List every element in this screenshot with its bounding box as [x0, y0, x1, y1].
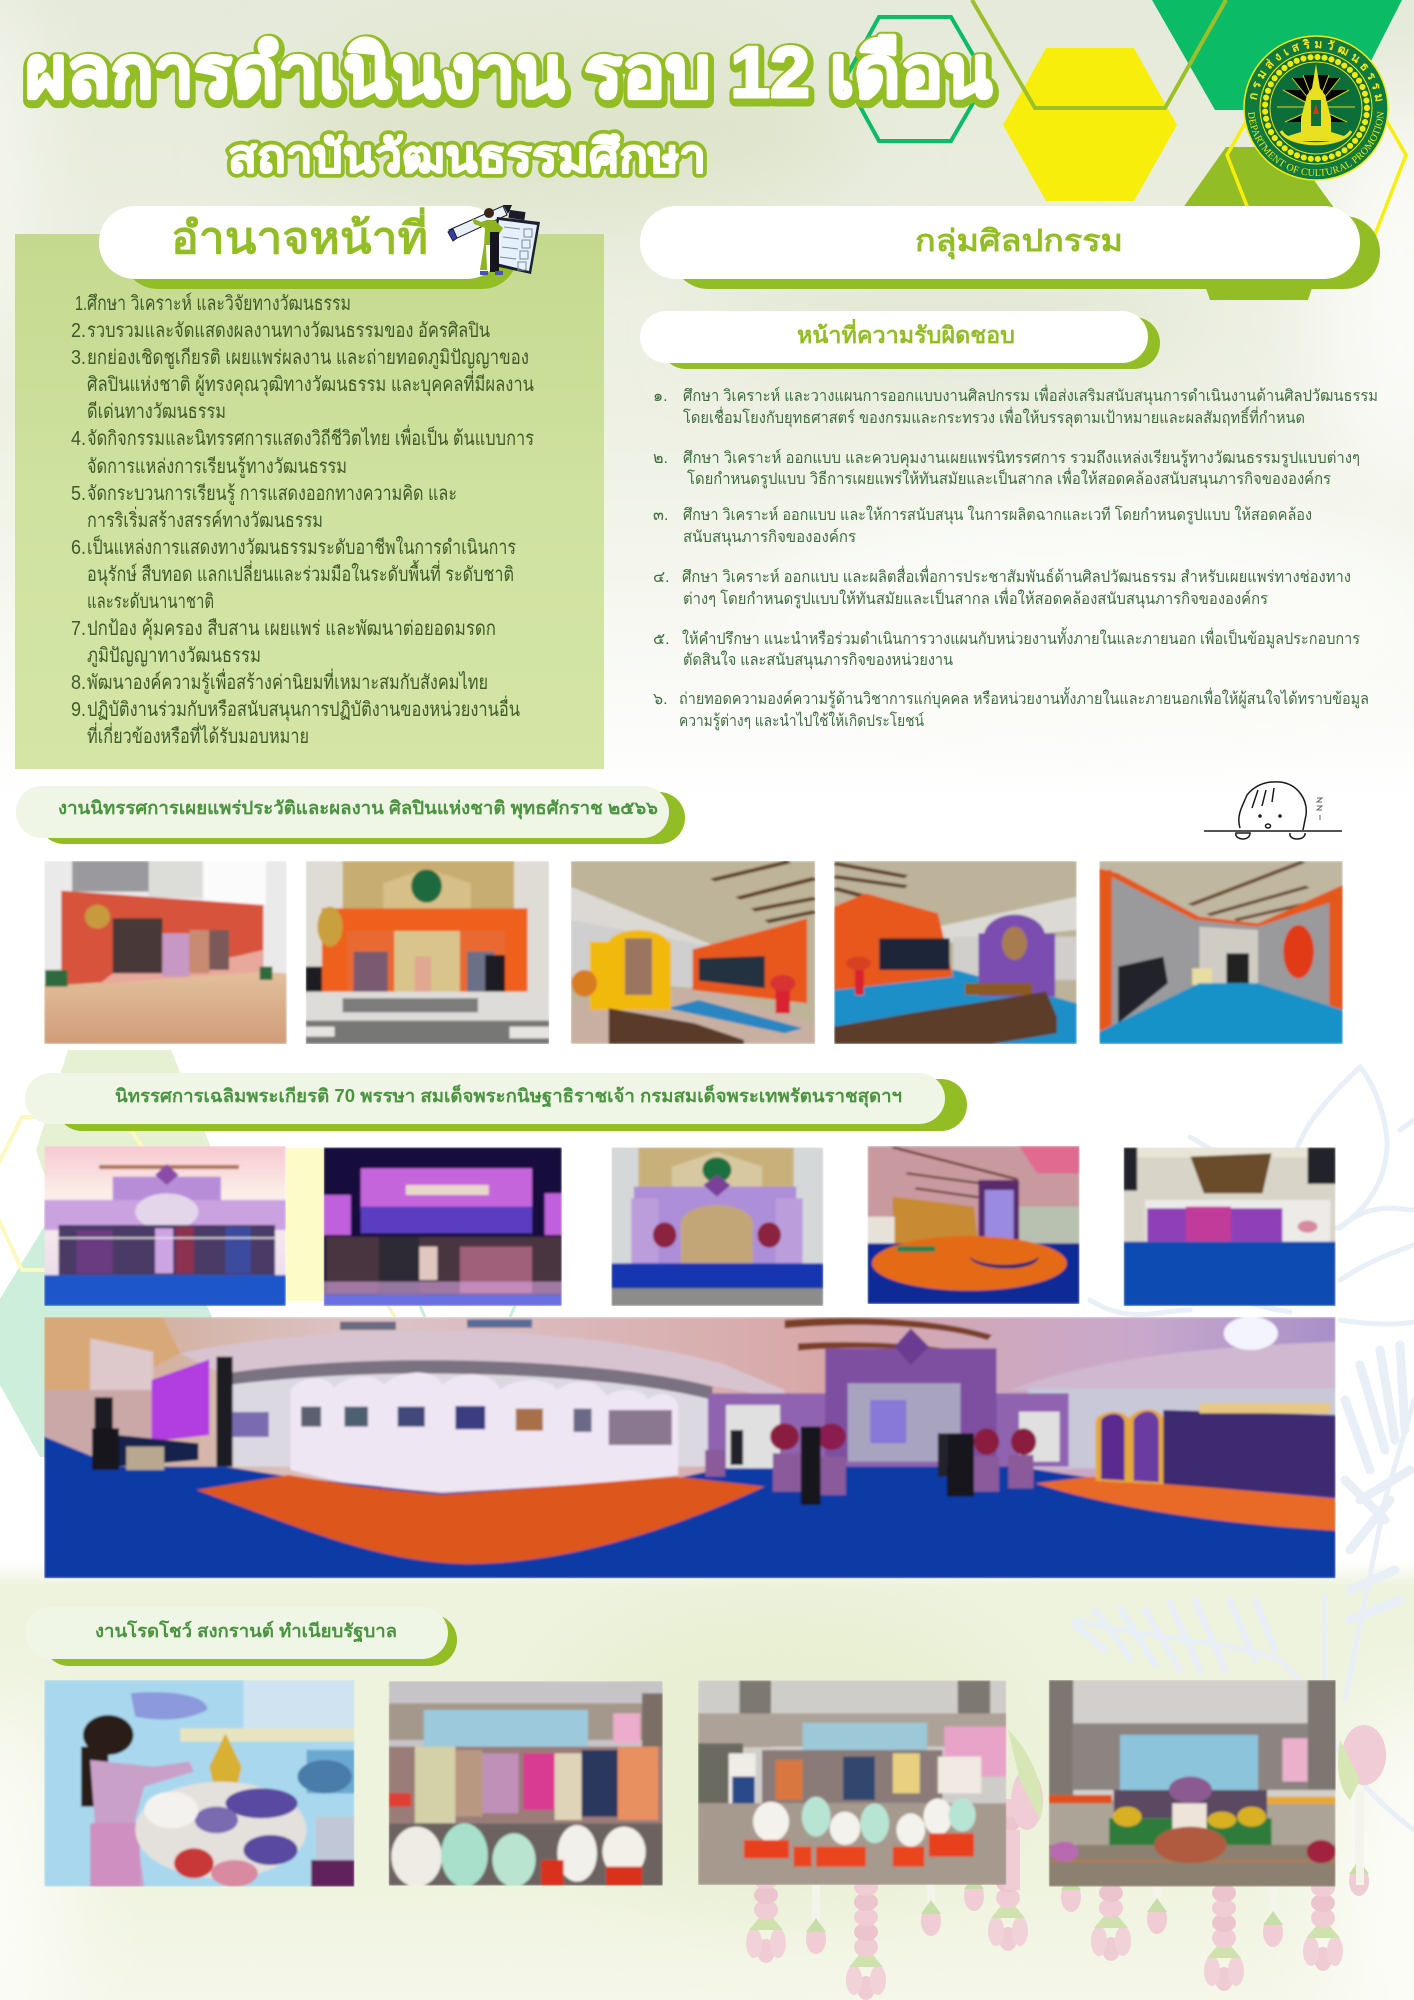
title: ผลการดำเนินงาน รอบ 12 เดือน — [25, 33, 992, 113]
logo: Department of Cultural Promotion seal — [1243, 35, 1389, 181]
responsibilities list: ๑. — [653, 388, 668, 405]
responsibilities list: ตัดสินใจ และสนับสนุนภารกิจของหน่วยงาน — [683, 650, 953, 670]
duties list: จัดกระบวนการเรียนรู้ การแสดงออกทางความคิด และ — [87, 483, 457, 506]
duties list: 6. — [71, 537, 86, 559]
photo: purple boards on blue floor — [1124, 1147, 1336, 1306]
responsibilities list — [653, 384, 1378, 731]
heading pill: responsibilities: หน้าที่ความรับผิดชอบ — [797, 318, 1015, 348]
palm fronds: right side — [1075, 1345, 1414, 1830]
hexagon: solid yellow — [1003, 48, 1177, 201]
heading pill: duties: อำนาจหน้าที่ — [171, 207, 428, 263]
duties list: จัดกิจกรรมและนิทรรศการแสดงวิถีชีวิตไทย เพื่อเป็น ต้นแบบการ — [87, 424, 534, 450]
heading pill: 70th birthday exhibition: นิทรรศการเฉลิมพระเกียรติ 70 พรรษา สมเด็จพระกนิษฐาธิราชเจ้า กรมสมเด็จพระเทพรัตนราชสุดาฯ — [115, 1084, 902, 1108]
duties list: รวบรวมและจัดแสดงผลงานทางวัฒนธรรมของ อัครศิลปิน — [87, 320, 490, 342]
responsibilities list: ศึกษา วิเคราะห์ ออกแบบ และควบคุมงานเผยแพร่นิทรรศการ รวมถึงแหล่งเรียนรู้ทางวัฒนธรรมรูปแบบต่างๆ — [683, 448, 1360, 468]
hexagon: olive outline — [972, 0, 1226, 108]
decorative hex strokes below second row — [388, 1306, 515, 1317]
logo: Department of Cultural Promotion seal: DEPARTMENT OF CULTURAL PROMOTION — [1248, 112, 1384, 176]
responsibilities list: ๓. — [653, 507, 668, 524]
heading pill: national artist exhibition — [16, 786, 685, 844]
photo row 3: Songkran — [44, 1680, 1336, 1887]
duties list: ดีเด่นทางวัฒนธรรม — [87, 401, 226, 423]
photo: woman pouring water — [44, 1680, 354, 1887]
title: ผลการดำเนินงาน รอบ 12 เดือน — [26, 36, 993, 116]
duties list: ศิลปินแห่งชาติ ผู้ทรงคุณวุฒิทางวัฒนธรรม และบุคคลที่มีผลงาน — [87, 370, 534, 397]
heading pill: 70th birthday exhibition — [25, 1073, 967, 1131]
photo: yellow arch and orange box — [571, 861, 815, 1044]
photo: group seated — [698, 1680, 1006, 1885]
hexagon: yellow outline — [1227, 87, 1406, 255]
photo: dignitaries and children — [389, 1681, 663, 1887]
duties list: 8. — [71, 672, 86, 694]
duties list: 5. — [71, 483, 86, 505]
duties list: ยกย่องเชิดชูเกียรติ เผยแพร่ผลงาน และถ่ายทอดภูมิปัญญาของ — [87, 347, 529, 370]
duties list: 4. — [71, 428, 86, 450]
panoramic photo: exhibition hall — [44, 1317, 1336, 1578]
hexagon: yellow outline left — [0, 1117, 178, 1270]
photo: mural and orange stage — [868, 1146, 1079, 1304]
subtitle: สถาบันวัฒนธรรมศึกษา — [228, 130, 706, 182]
heading pill: responsibilities — [640, 311, 1160, 369]
photo: offering table and backdrop — [1049, 1680, 1336, 1887]
photo: red backdrop — [44, 861, 287, 1044]
hexagon: solid green top right — [1152, 0, 1402, 110]
heading pill: art group — [640, 206, 1380, 289]
duties list: ปกป้อง คุ้มครอง สืบสาน เผยแพร่ และพัฒนาต่อยอดมรดก — [87, 618, 496, 641]
responsibilities list: ความรู้ต่างๆ และนำไปใช้ให้เกิดประโยชน์ — [679, 711, 924, 731]
heading pill: art group: กลุ่มศิลปกรรม — [915, 225, 1123, 260]
photo: group on stage — [324, 1147, 562, 1306]
leaf outlines: right side — [1090, 1067, 1414, 1324]
photo: gallery corridor — [1099, 861, 1343, 1044]
duties list: 1. — [75, 293, 87, 315]
responsibilities list: ให้คำปรึกษา แนะนำหรือร่วมดำเนินการวางแผนกับหน่วยงานทั้งภายในและภายนอก เพื่อเป็นข้อมูลประกอบการ — [682, 627, 1360, 649]
subtitle: สถาบันวัฒนธรรมศึกษา — [228, 130, 706, 182]
duties list: 9. — [71, 699, 86, 721]
duties list: และระดับนานาชาติ — [87, 591, 214, 613]
duties list: ที่เกี่ยวข้องหรือที่ได้รับมอบหมาย — [87, 722, 309, 748]
responsibilities list: ศึกษา วิเคราะห์ ออกแบบ และผลิตสื่อเพื่อการประชาสัมพันธ์ด้านศิลปวัฒนธรรม สำหรับเผยแพร่ทางช่องทาง — [682, 565, 1351, 586]
heading pill: Songkran roadshow — [25, 1607, 457, 1666]
heading pill: Songkran roadshow: งานโรดโชว์ สงกรานต์ ทำเนียบรัฐบาล — [95, 1620, 397, 1643]
hexagon: green outline — [845, 17, 987, 141]
responsibilities list: สนับสนุนภารกิจขององค์กร — [683, 527, 856, 547]
hexagon: mint left — [0, 1225, 212, 1457]
duties list: เป็นแหล่งการแสดงทางวัฒนธรรมระดับอาชีพในการดำเนินการ — [87, 534, 516, 559]
duties list: ศึกษา วิเคราะห์ และวิจัยทางวัฒนธรรม — [87, 292, 351, 315]
icon: peeking doodle character — [1204, 782, 1342, 839]
responsibilities list: โดยกำหนดรูปแบบ วิธีการเผยแพร่ให้ทันสมัยและเป็นสากล เพื่อให้สอดคล้องสนับสนุนภารกิจขององค์กร — [687, 467, 1331, 489]
heading pill: duties — [99, 206, 518, 289]
photo: ribbon cutting — [44, 1146, 286, 1306]
duties list: การริเริ่มสร้างสรรค์ทางวัฒนธรรม — [87, 506, 323, 532]
duties list: จัดการแหล่งการเรียนรู้ทางวัฒนธรรม — [87, 456, 347, 479]
hexagon: solid olive — [1180, 147, 1337, 300]
responsibilities list: ศึกษา วิเคราะห์ ออกแบบ และให้การสนับสนุน ในการผลิตฉากและเวที โดยกำหนดรูปแบบ ให้สอดคล้อง — [683, 505, 1312, 525]
panel: duties — [15, 234, 604, 769]
logo: Department of Cultural Promotion seal: กรมส่งเสริมวัฒนธรรม — [1250, 38, 1383, 102]
responsibilities list: ๖. — [653, 691, 668, 708]
responsibilities list: โดยเชื่อมโยงกับยุทธศาสตร์ ของกรมและกระทรวง เพื่อให้บรรลุตามเป้าหมายและผลสัมฤทธิ์ที่กำหนด — [683, 406, 1305, 428]
duties list: 3. — [71, 347, 86, 369]
photo row 2: birthday exhibition — [44, 1146, 1336, 1306]
icon: person with clipboard — [448, 205, 540, 275]
photo row 1: national artist exhibition — [44, 861, 1343, 1044]
hexagon: pale green left — [36, 1050, 212, 1250]
duties list: ปฏิบัติงานร่วมกับหรือสนับสนุนการปฏิบัติงานของหน่วยงานอื่น — [87, 695, 520, 722]
heading pill: national artist exhibition: งานนิทรรศการเผยแพร่ประวัติและผลงาน ศิลปินแห่งชาติ พุทธศักราช ๒๕๖๖ — [58, 798, 658, 820]
responsibilities list: ๕. — [653, 631, 670, 648]
duties list: 2. — [71, 320, 86, 342]
duties list: พัฒนาองค์ความรู้เพื่อสร้างค่านิยมที่เหมาะสมกับสังคมไทย — [87, 668, 488, 695]
photo: purple gateway — [611, 1147, 823, 1306]
garlands: bottom decoration — [746, 1725, 1386, 2000]
duties list: อนุรักษ์ สืบทอด แลกเปลี่ยนและร่วมมือในระดับพื้นที่ ระดับชาติ — [87, 560, 514, 587]
responsibilities list: ต่างๆ โดยกำหนดรูปแบบให้ทันสมัยและเป็นสากล เพื่อให้สอดคล้องสนับสนุนภารกิจขององค์กร — [683, 587, 1268, 609]
duties list — [71, 292, 534, 748]
responsibilities list: ๔. — [653, 569, 670, 586]
duties list: 7. — [71, 618, 86, 640]
yellow block behind photos — [286, 1148, 324, 1301]
photo: orange box and purple arch — [834, 861, 1077, 1044]
duties list: ภูมิปัญญาทางวัฒนธรรม — [87, 645, 261, 668]
photo: orange gate — [306, 861, 549, 1044]
responsibilities list: ๒. — [653, 450, 668, 467]
